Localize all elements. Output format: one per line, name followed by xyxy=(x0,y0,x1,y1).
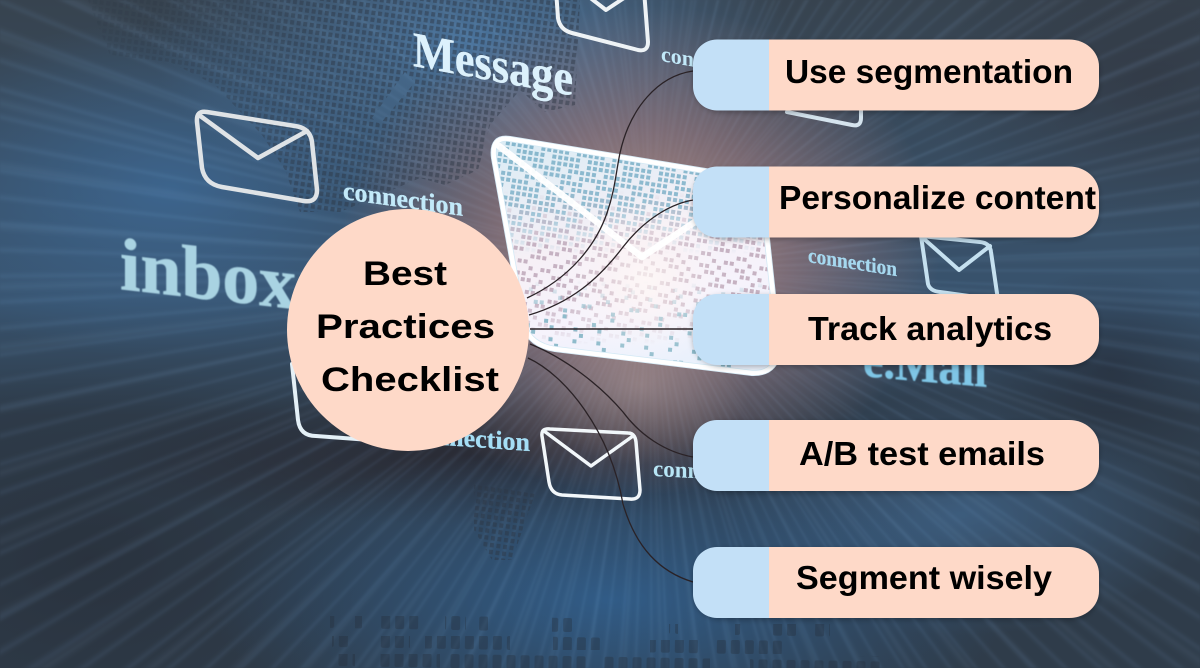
word: connection upper left: connection xyxy=(343,176,463,222)
word: connection behind first pill: connection xyxy=(661,41,762,84)
icon: large central envelope xyxy=(490,136,777,376)
icon: envelope right xyxy=(921,236,998,300)
word: inbox: inbox xyxy=(120,224,296,326)
icon: envelope partly behind first pill xyxy=(787,100,861,125)
pill: A/B test emails xyxy=(693,420,1099,491)
pill: Personalize content xyxy=(693,166,1099,238)
heading line: Checklist: Checklist xyxy=(321,361,499,399)
dotted world map: upper continents xyxy=(138,0,580,212)
word: Message: Message xyxy=(413,21,573,107)
word: e.Mail: e.Mail xyxy=(863,331,987,398)
pill: Segment wisely: Segment wisely xyxy=(796,559,1053,596)
icon: envelope behind circle xyxy=(292,364,370,440)
dotted world map: lower continents xyxy=(330,484,880,668)
connector lines from circle to pills xyxy=(527,71,693,582)
envelope central glow xyxy=(560,195,730,365)
envelope dot patterns xyxy=(496,142,770,368)
envelope outline and flap xyxy=(494,139,778,373)
pill: Personalize content: Personalize content xyxy=(779,179,1096,216)
word: connection lower: connection xyxy=(410,420,531,457)
icon: envelope upper left xyxy=(197,112,317,201)
central circle: Best Practices Checklist xyxy=(287,209,529,451)
pill: Use segmentation: Use segmentation xyxy=(785,53,1073,90)
icon: envelope top xyxy=(556,0,648,50)
pill: Track analytics: Track analytics xyxy=(808,310,1052,347)
word: connection behind fourth pill: connection xyxy=(653,455,759,487)
heading line: Best: Best xyxy=(363,255,447,293)
word: connection right: connection xyxy=(808,243,897,281)
icon: envelope lower center xyxy=(542,429,640,499)
pill: Use segmentation xyxy=(693,40,1099,110)
pill: Segment wisely xyxy=(693,547,1099,618)
pill: Track analytics xyxy=(693,294,1099,365)
pill: A/B test emails: A/B test emails xyxy=(799,435,1045,472)
heading line: Practices: Practices xyxy=(316,308,495,346)
